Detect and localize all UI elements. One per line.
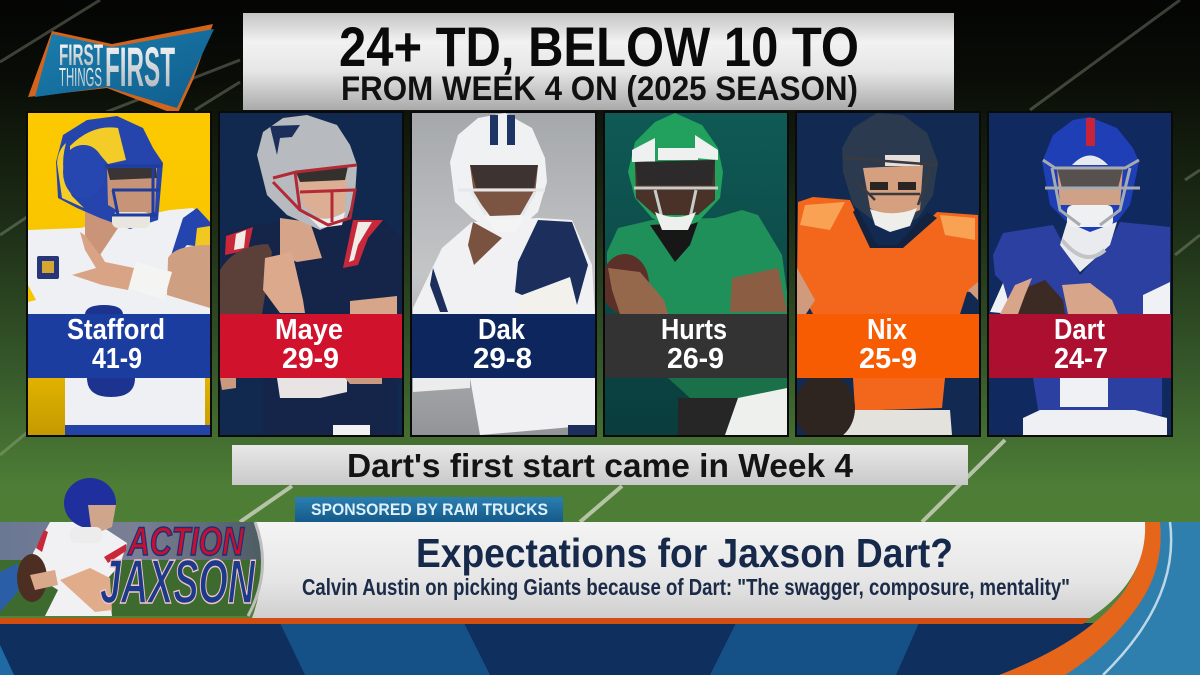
- card: Dak: [410, 111, 597, 437]
- label: Maye: [220, 314, 402, 378]
- caption strip: Dart's first start came in Week 4: [347, 447, 854, 484]
- label: Nix: Nix: [867, 314, 907, 346]
- card: Maye: [218, 111, 404, 437]
- title line 1: 24+ TD, BELOW 10 TO: [339, 15, 859, 78]
- label: Dak: Dak: [478, 314, 526, 346]
- sponsor tag: SPONSORED BY RAM TRUCKS: [311, 500, 548, 519]
- action jaxson wordmark: JAXSON: [100, 548, 256, 617]
- card: Dart: [987, 111, 1173, 437]
- action jaxson wordmark: ACTION: [127, 520, 245, 564]
- label: Dak: 29-8: [473, 343, 532, 375]
- logo: First Things First: FIRST: [59, 39, 103, 72]
- action jaxson wordmark: [100, 520, 256, 617]
- label: Maye: Maye: [275, 314, 343, 346]
- label: Hurts: Hurts: [661, 314, 727, 346]
- logo: First Things First: FIRST: [105, 35, 175, 98]
- label: Dart: [989, 314, 1171, 378]
- title line 2: FROM WEEK 4 ON (2025 SEASON): [341, 70, 858, 108]
- title panel: [243, 13, 954, 110]
- label: Hurts: 26-9: [667, 343, 724, 375]
- headline: Expectations for Jaxson Dart?: [416, 530, 953, 576]
- bottom band: [0, 522, 1200, 675]
- lower third panel: [0, 522, 1145, 624]
- label: Dak: [412, 314, 595, 378]
- label: Stafford: [28, 314, 210, 378]
- label: Dart: 24-7: [1054, 343, 1108, 375]
- card: Hurts: [601, 111, 789, 437]
- label: Hurts: [605, 314, 787, 378]
- label: Stafford: 41-9: [92, 343, 142, 375]
- label: Nix: 25-9: [859, 343, 917, 375]
- label: Maye: 29-9: [282, 343, 339, 375]
- logo: First Things First: [28, 24, 214, 115]
- player: Dart in white: [17, 478, 127, 616]
- card: Stafford: [26, 111, 212, 437]
- caption strip: [232, 445, 968, 485]
- logo: First Things First: THINGS: [59, 62, 102, 92]
- label: Dart: Dart: [1054, 314, 1105, 346]
- card: Nix: [795, 111, 981, 442]
- Action Jaxson graphic: [0, 478, 270, 618]
- label: Nix: [797, 314, 979, 378]
- label: Stafford: Stafford: [67, 314, 165, 346]
